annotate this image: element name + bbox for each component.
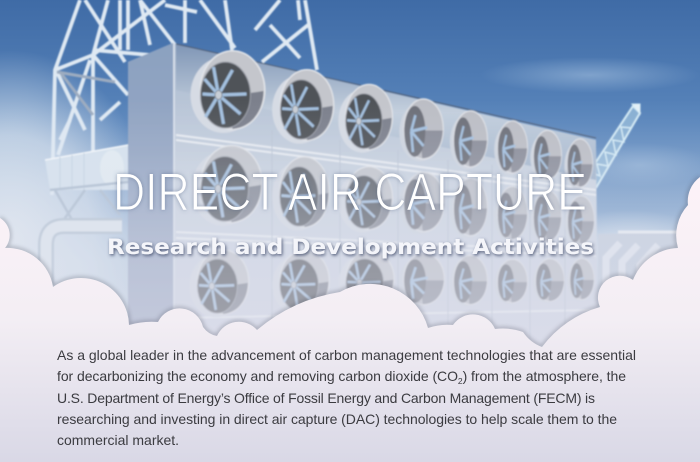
tower machinery box xyxy=(45,145,128,225)
title: DIRECT AIR CAPTURE xyxy=(113,163,587,222)
crane arm xyxy=(584,104,640,188)
body text: 2 xyxy=(458,376,463,386)
body text: commercial market. xyxy=(57,432,179,448)
right pipework structure xyxy=(598,232,680,310)
body text: As a global leader in the advancement of carbon management technologies that are essential xyxy=(57,347,636,363)
body text: researching and investing in direct air capture (DAC) technologies to help scale them to the xyxy=(57,411,617,427)
body text: U.S. Department of Energy’s Office of Fossil Energy and Carbon Management (FECM) is xyxy=(57,390,595,406)
cloud shadow xyxy=(0,177,700,347)
body text: ) from the atmosphere, the xyxy=(463,368,626,384)
fans row 3 xyxy=(189,249,595,317)
fan block side panel xyxy=(128,43,175,345)
tower lattice xyxy=(52,0,317,195)
body text: for decarbonizing the economy and removing carbon dioxide (CO xyxy=(57,368,458,384)
fans row 1 xyxy=(190,50,593,189)
subtitle: Research and Development Activities xyxy=(107,235,594,260)
fans row 2 xyxy=(192,145,595,246)
photo: direct air capture plant xyxy=(45,0,680,345)
panel seams xyxy=(176,130,596,340)
fan block body xyxy=(128,43,598,345)
body text xyxy=(57,347,636,448)
left pipe xyxy=(46,226,122,285)
upper metal band xyxy=(176,44,596,180)
cloud foreground panel xyxy=(0,177,700,462)
atmospheric veil xyxy=(0,100,700,350)
